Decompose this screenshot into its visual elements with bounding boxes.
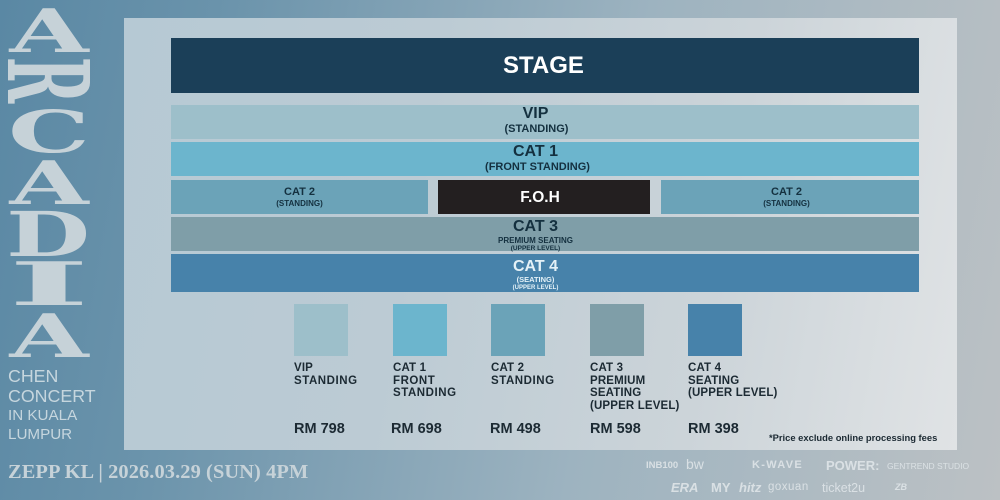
zone: CAT 2 right: CAT 2 <box>771 186 802 198</box>
legend: VIP <box>294 304 358 437</box>
legend: CAT 1 <box>391 304 457 437</box>
zone: VIP: VIP <box>523 105 548 122</box>
legend: CAT 3: PREMIUM <box>590 375 645 387</box>
title: ARCADIA stacked letters: D <box>6 199 90 271</box>
legend: CAT 3: CAT 3 <box>590 362 623 374</box>
legend: CAT 2: RM 498 <box>490 421 541 437</box>
legend: CAT 4: (UPPER LEVEL) <box>688 387 778 399</box>
event date and venue: ZEPP KL | 2026.03.29 (SUN) 4PM <box>8 461 308 483</box>
legend: CAT 3: SEATING <box>590 387 641 399</box>
zone: VIP <box>171 105 919 139</box>
sponsor logos: MY <box>711 480 730 495</box>
legend: CAT 3: (UPPER LEVEL) <box>590 400 680 412</box>
zone: CAT 2 left <box>171 180 428 214</box>
legend: CAT 1: FRONT <box>393 375 435 387</box>
sponsor logos: GENTREND STUDIO <box>887 461 969 471</box>
sponsor logos: goxuan <box>768 481 809 493</box>
subtitle: Chen concert in Kuala Lumpur: CHEN <box>8 366 58 386</box>
zone: CAT 3: PREMIUM SEATING <box>498 236 573 245</box>
sponsor logos: POWER: <box>826 458 879 473</box>
zone: CAT 3 <box>171 217 919 251</box>
legend: VIP: VIP <box>294 362 313 374</box>
legend: CAT 1: CAT 1 <box>393 362 426 374</box>
sponsor logos: ZB <box>895 482 907 492</box>
sponsor logos: INB100 <box>646 460 678 471</box>
zone: CAT 4: (UPPER LEVEL) <box>513 285 558 291</box>
title: ARCADIA stacked letters: I <box>8 249 90 319</box>
zone: CAT 2 left: CAT 2 <box>284 186 315 198</box>
zone: CAT 1: (FRONT STANDING) <box>485 161 590 173</box>
sponsor logos: ticket2u <box>822 481 865 495</box>
zone: CAT 1: CAT 1 <box>513 143 558 160</box>
subtitle: Chen concert in Kuala Lumpur: CONCERT <box>8 386 96 406</box>
sponsor logos: ERA <box>671 480 698 495</box>
zone: CAT 2 right <box>661 180 919 214</box>
footnote: price note: *Price exclude online processing fees <box>769 432 937 443</box>
subtitle: Chen concert in Kuala Lumpur: IN KUALA <box>8 407 77 424</box>
zone: CAT 2 left: (STANDING) <box>276 199 323 208</box>
legend: CAT 1: RM 698 <box>391 421 442 437</box>
stage <box>171 38 919 93</box>
subtitle: Chen concert in Kuala Lumpur <box>8 366 96 443</box>
stage: STAGE <box>503 52 584 79</box>
zone: CAT 3: CAT 3 <box>513 218 558 235</box>
legend: CAT 4: SEATING <box>688 375 739 387</box>
sponsor logos: K-WAVE <box>752 459 803 471</box>
legend: VIP: RM 798 <box>294 421 345 437</box>
subtitle: Chen concert in Kuala Lumpur: LUMPUR <box>8 426 72 443</box>
sponsor logos <box>646 456 969 495</box>
legend: CAT 4: CAT 4 <box>688 362 721 374</box>
title: ARCADIA stacked letters <box>0 0 113 360</box>
legend: CAT 3: RM 598 <box>590 421 641 437</box>
sponsor logos: bw <box>686 456 704 472</box>
zone: CAT 1 <box>171 142 919 176</box>
legend: CAT 3 <box>590 304 680 437</box>
title: ARCADIA stacked letters: A <box>8 147 90 218</box>
legend: CAT 2: CAT 2 <box>491 362 524 374</box>
legend: CAT 2: STANDING <box>491 375 555 387</box>
zone: CAT 4: CAT 4 <box>513 258 558 275</box>
zone: front of house <box>438 180 650 214</box>
zone: CAT 3: (UPPER LEVEL) <box>511 245 560 252</box>
legend: VIP: STANDING <box>294 375 358 387</box>
zone: CAT 4 <box>171 254 919 292</box>
legend: CAT 1: STANDING <box>393 387 457 399</box>
legend: CAT 4: RM 398 <box>688 421 739 437</box>
sponsor logos: hitz <box>739 480 761 495</box>
zone: CAT 2 right: (STANDING) <box>763 199 810 208</box>
zone: front of house: F.O.H <box>520 189 560 206</box>
legend: CAT 4 <box>688 304 778 437</box>
legend: CAT 2 <box>490 304 555 437</box>
panel: seating plan <box>124 18 957 450</box>
zone: CAT 4: (SEATING) <box>517 275 554 284</box>
zone: VIP: (STANDING) <box>505 123 568 135</box>
title: ARCADIA stacked letters: C <box>8 98 90 166</box>
